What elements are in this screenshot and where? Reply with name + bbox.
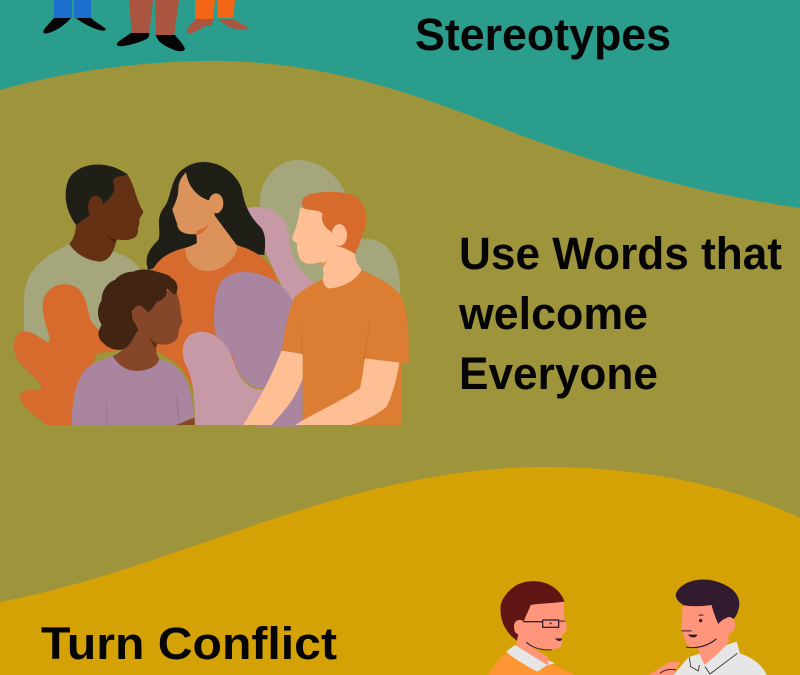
man in orange shirt bbox=[243, 192, 409, 425]
man in sage shirt bbox=[24, 165, 143, 343]
illustration: group of four people bbox=[14, 160, 409, 427]
line 2: welcome bbox=[458, 288, 648, 339]
orange leaf foliage bbox=[14, 284, 120, 425]
woman in orange shirt bbox=[140, 162, 278, 407]
text block: Use Words that welcome Everyone bbox=[458, 228, 782, 399]
man with glasses bbox=[488, 581, 575, 675]
man in white shirt bbox=[648, 579, 767, 675]
line 1: Use Words that bbox=[459, 228, 782, 279]
person 3 legs bbox=[187, 0, 248, 34]
panel: teal band bbox=[0, 0, 800, 300]
person 2 legs bbox=[117, 0, 185, 51]
panel: gold band bbox=[0, 467, 800, 675]
illustration: two men talking bbox=[488, 579, 767, 675]
child in lilac shirt bbox=[72, 270, 195, 425]
illustration: feet of three people bbox=[43, 0, 248, 51]
pink foreground foliage bbox=[183, 332, 277, 425]
line 3: Everyone bbox=[459, 348, 658, 399]
heading: Stereotypes: Stereotypes bbox=[415, 9, 671, 60]
person 1 legs bbox=[43, 0, 106, 34]
purple foliage bbox=[214, 272, 302, 427]
pink background foliage bbox=[246, 207, 315, 303]
heading: Turn Conflict: Turn Conflict bbox=[41, 618, 337, 669]
sage background foliage bbox=[260, 160, 400, 293]
